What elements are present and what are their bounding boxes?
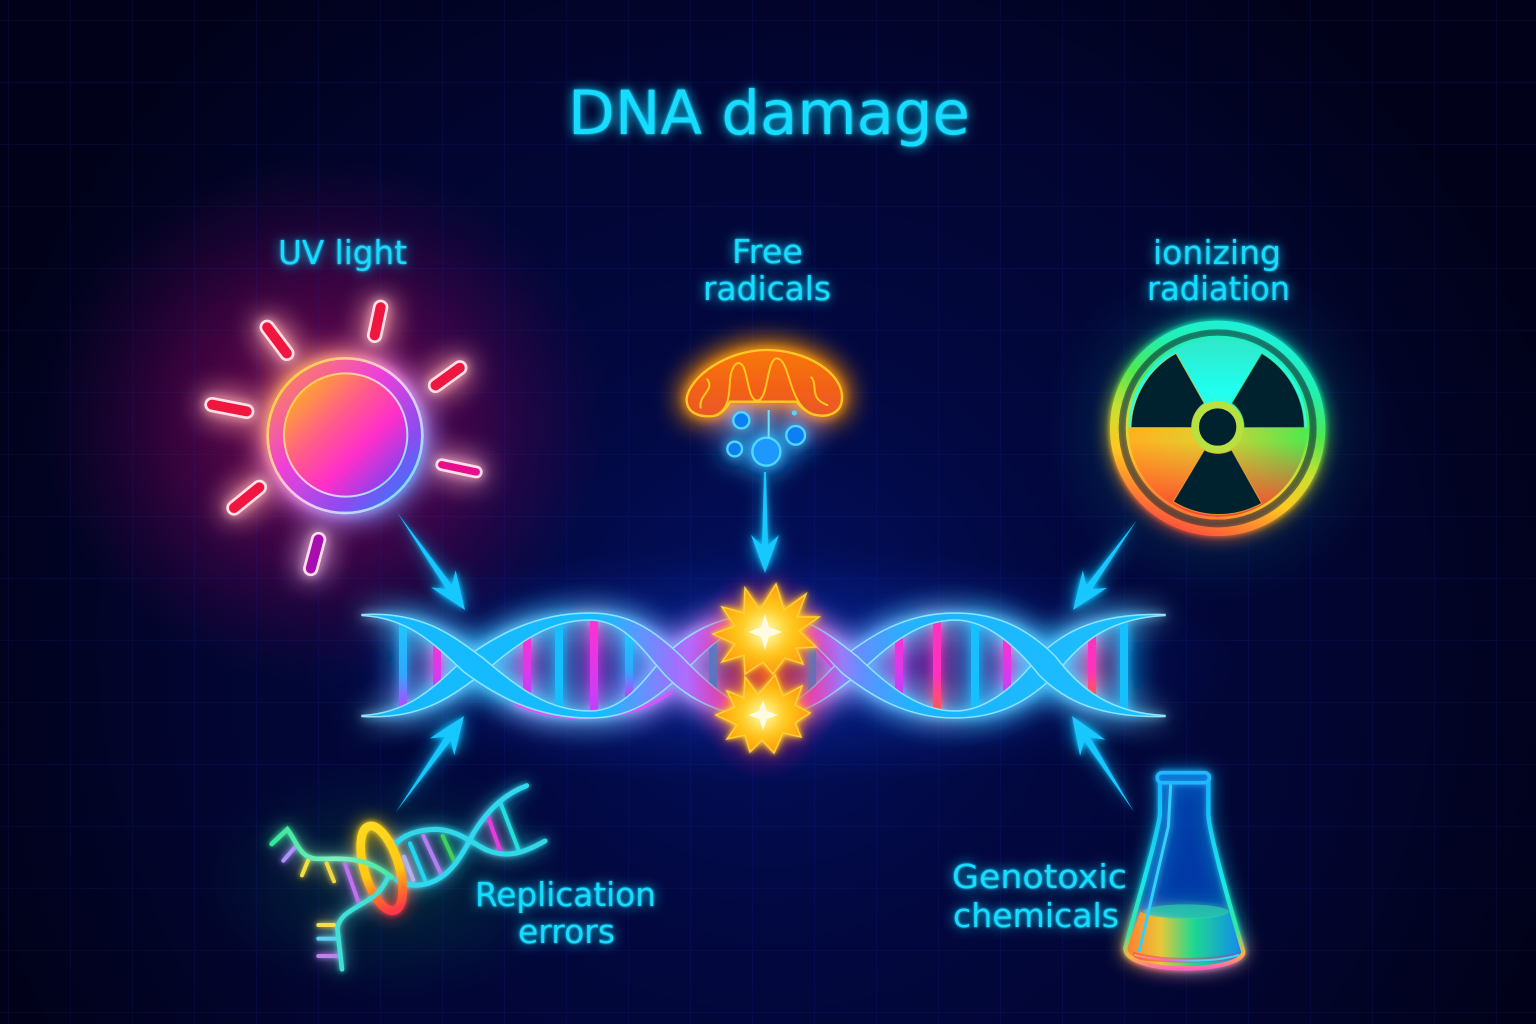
label: Free radicals [703,232,831,308]
helix strands [394,786,545,885]
strand two front crossings [625,618,1090,710]
mitochondrion [687,350,842,416]
flask glass [1125,773,1243,968]
title: DNA damage [568,78,970,149]
label: Genotoxic chemicals: chemicals [953,896,1119,935]
icon: UV sun [205,300,482,576]
strand one [362,614,1165,718]
strand two [362,613,1165,717]
label: UV light: UV light [278,233,407,272]
arrow: free radicals to DNA [751,472,779,573]
label: ionizing radiation [1147,233,1290,308]
DNA double helix [362,613,1165,718]
icon: flask [1125,773,1243,968]
label: Genotoxic chemicals [952,857,1127,935]
icon: mitochondrion with free radicals [687,350,842,466]
star: upper burst [713,584,819,674]
label: Free radicals: Free [732,232,803,271]
arrow: replication to DNA [384,707,476,821]
sun disc [268,358,422,513]
star: lower burst [716,675,810,753]
label: ionizing radiation: radiation [1147,269,1290,308]
label: Replication errors: Replication [475,875,656,914]
damage burst glow [687,564,843,780]
fork strands [272,829,392,969]
icon: replication fork [272,786,545,969]
trefoil [1127,337,1308,518]
polymerase ring [352,821,411,915]
label: Replication errors [475,875,656,951]
label: Genotoxic chemicals: Genotoxic [952,857,1127,896]
label: Replication errors: errors [518,912,615,951]
sun rays [205,300,482,576]
icon: radiation symbol [1114,325,1321,532]
liquid [1125,904,1243,967]
arrow: chemicals to DNA [1059,708,1147,820]
magenta underline of strands [515,618,835,718]
flask interior [1125,783,1243,968]
arrow: radiation to DNA [1061,512,1149,619]
label: Free radicals: radicals [703,269,831,308]
radical bubbles [727,410,805,466]
base pairs [399,620,1128,711]
damage stars [713,584,819,753]
fork base pairs [283,803,518,956]
outer rings [1114,325,1321,532]
arrow: UV to DNA [385,504,477,619]
label: ionizing radiation: ionizing [1153,233,1281,272]
